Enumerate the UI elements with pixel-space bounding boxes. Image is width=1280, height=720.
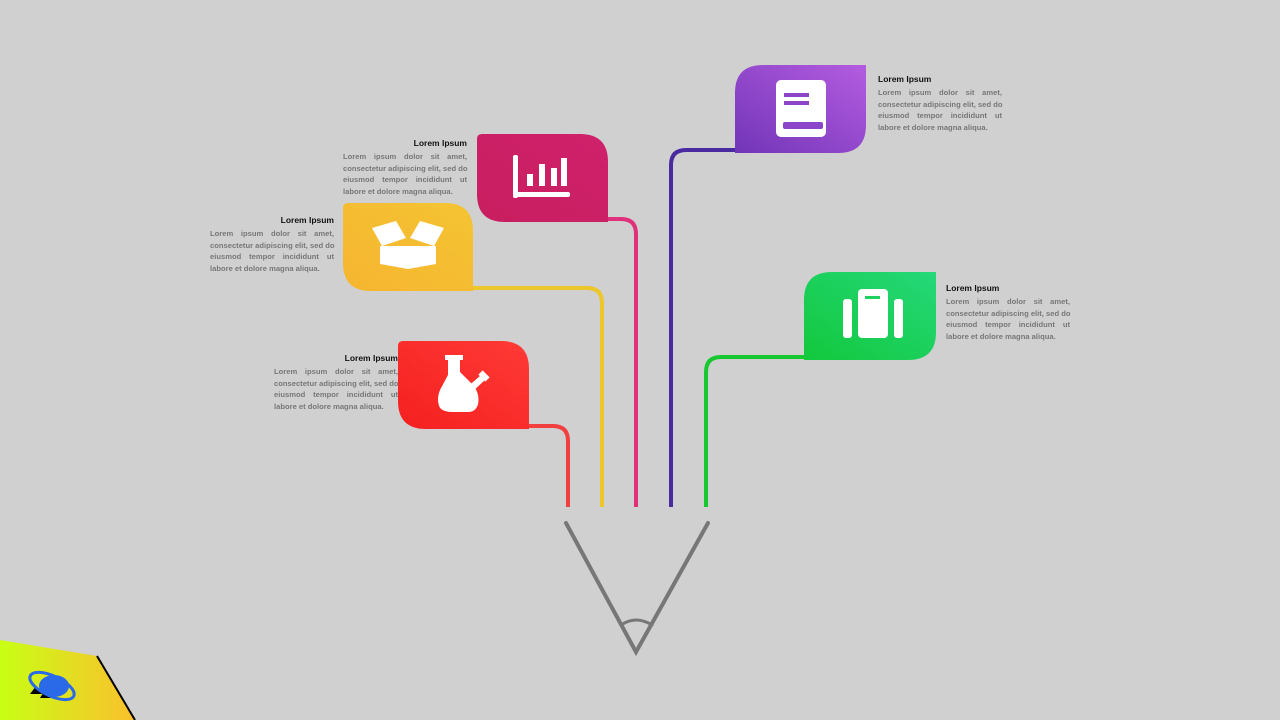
text: magenta <box>343 138 468 196</box>
connector: magenta <box>600 219 636 507</box>
connector: green <box>706 357 812 507</box>
text: green: labore et dolore magna aliqua. <box>946 332 1056 340</box>
text: magenta: Lorem ipsum dolor sit amet, <box>343 152 467 161</box>
text: purple: labore et dolore magna aliqua. <box>878 122 988 132</box>
text: green: Lorem Ipsum <box>946 283 999 293</box>
text: yellow: eiusmod tempor incididunt ut <box>210 252 334 261</box>
box: purple book <box>735 65 866 153</box>
text: yellow <box>210 215 334 272</box>
text: red: Lorem Ipsum <box>345 353 398 363</box>
box: yellow box <box>343 203 473 291</box>
text: purple: Lorem Ipsum <box>878 74 931 84</box>
icon: suitcase <box>843 289 903 338</box>
text: purple: Lorem ipsum dolor sit amet, <box>878 88 1002 97</box>
icon: book <box>776 80 826 137</box>
text: magenta: consectetur adipiscing elit, sed do <box>343 164 467 172</box>
icon: flask <box>438 355 490 412</box>
text: red: consectetur adipiscing elit, sed do <box>274 378 398 388</box>
text: yellow: Lorem ipsum dolor sit amet, <box>210 229 334 238</box>
box: magenta chart <box>477 134 608 222</box>
box: green suitcase <box>804 272 936 360</box>
text: magenta: labore et dolore magna aliqua. <box>343 186 453 196</box>
text: red: Lorem ipsum dolor sit amet, <box>274 367 398 376</box>
connector: purple <box>671 150 745 507</box>
text: magenta: Lorem Ipsum <box>414 138 467 148</box>
text: yellow: Lorem Ipsum <box>281 215 334 225</box>
connector: yellow <box>465 288 602 507</box>
box: red flask <box>398 341 529 429</box>
text: purple: consectetur adipiscing elit, sed do <box>878 100 1002 108</box>
icon: open box <box>372 221 444 269</box>
text: red: eiusmod tempor incididunt ut <box>274 390 398 399</box>
text: red <box>274 353 398 410</box>
text: purple: eiusmod tempor incididunt ut <box>878 111 1002 120</box>
connector: red <box>520 426 568 507</box>
icon: bar chart <box>513 155 570 198</box>
logo corner <box>0 640 135 720</box>
text: red: labore et dolore magna aliqua. <box>274 402 384 410</box>
icon: logo <box>26 667 78 705</box>
pencil tip <box>566 523 708 652</box>
text: green: eiusmod tempor incididunt ut <box>946 320 1070 329</box>
text: purple <box>878 74 1002 132</box>
text: green: consectetur adipiscing elit, sed do <box>946 308 1070 318</box>
text: magenta: eiusmod tempor incididunt ut <box>343 175 467 184</box>
text: green: Lorem ipsum dolor sit amet, <box>946 297 1070 306</box>
text: yellow: consectetur adipiscing elit, sed do <box>210 240 334 250</box>
text: yellow: labore et dolore magna aliqua. <box>210 264 320 272</box>
text: green <box>946 283 1070 340</box>
